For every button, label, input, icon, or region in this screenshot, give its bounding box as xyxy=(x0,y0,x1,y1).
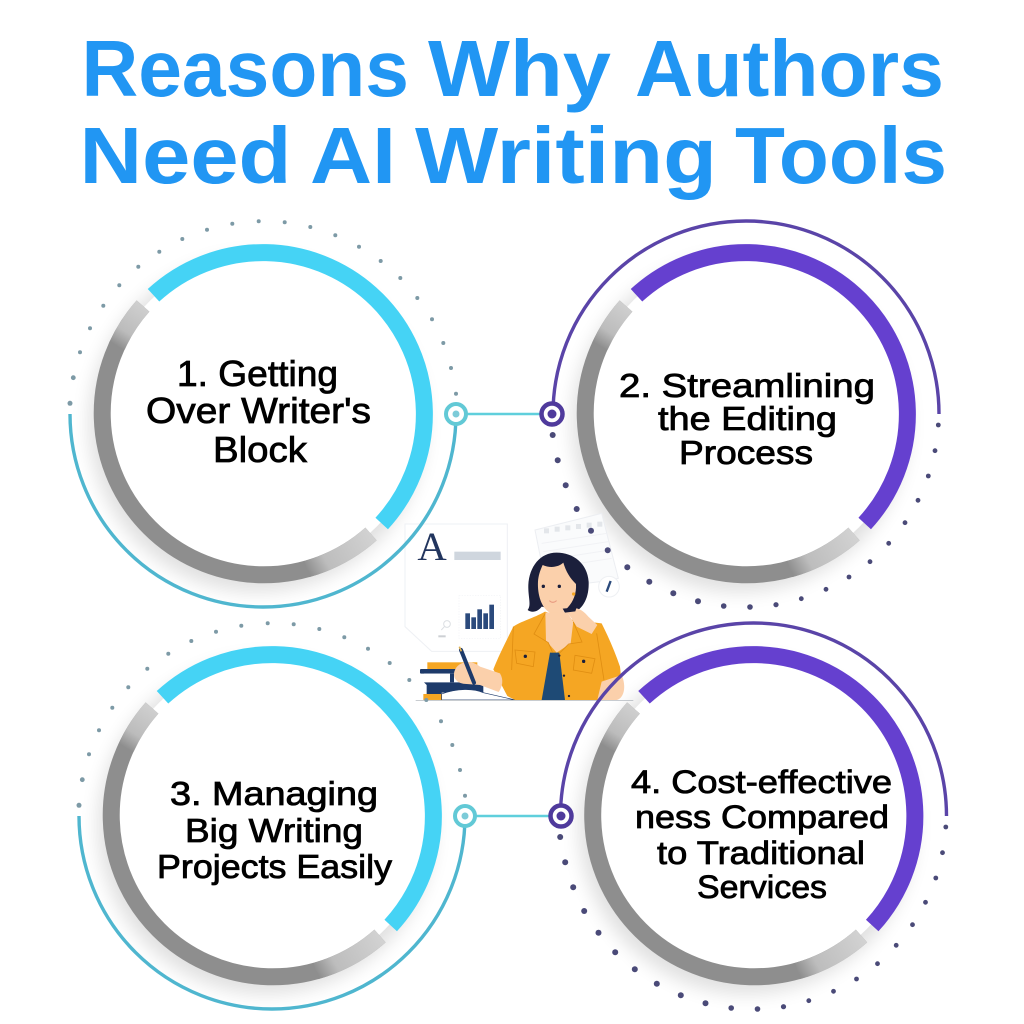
node: cyan xyxy=(446,404,466,424)
ring interiors xyxy=(103,254,914,976)
neck xyxy=(545,612,573,653)
title xyxy=(80,24,947,200)
label 2 xyxy=(619,367,875,471)
panel 2: streamlining the editing process xyxy=(550,221,941,610)
cyan ring segment xyxy=(154,253,424,524)
title line 2: Tools xyxy=(735,111,947,200)
jacket xyxy=(493,612,621,700)
document with letter A and chart: A xyxy=(417,524,447,569)
label 4: ness Compared xyxy=(635,799,889,835)
panel 4: cost-effectiveness xyxy=(557,623,948,1012)
cyan ring segment xyxy=(162,655,433,926)
label 1: Over Writer's xyxy=(146,390,371,431)
label 3: 3. Managing xyxy=(170,775,378,812)
label 1: Block xyxy=(213,429,308,470)
hair xyxy=(528,553,589,613)
thin outer arc xyxy=(560,623,946,816)
grey ring segment xyxy=(593,708,862,977)
dotted arc xyxy=(550,423,941,610)
title line 1: Authors xyxy=(635,24,944,113)
label 2: the Editing xyxy=(658,400,837,437)
books xyxy=(420,662,515,700)
label 4: 4. Cost-effective xyxy=(631,764,892,800)
label 4: Services xyxy=(697,869,827,905)
soft shadows under rings xyxy=(89,256,915,994)
thin outer arc xyxy=(553,221,939,414)
purple ring segment xyxy=(644,655,915,926)
dotted arc xyxy=(557,825,948,1012)
shirt xyxy=(542,653,565,700)
label 3: Projects Easily xyxy=(157,848,393,885)
face and neck xyxy=(538,563,576,614)
raised hand and elbow xyxy=(565,608,597,634)
pen xyxy=(459,647,474,683)
magnifier icon xyxy=(438,621,450,636)
title line 2: Writing xyxy=(415,111,717,200)
grey ring segment xyxy=(585,306,854,575)
label 2: 2. Streamlining xyxy=(619,367,875,404)
label 3 xyxy=(157,775,393,885)
connector: top circles xyxy=(446,404,562,424)
document with letter A and chart xyxy=(405,524,507,651)
thin outer arc xyxy=(70,414,456,607)
panel 3: managing big writing projects xyxy=(76,621,467,1009)
writing arm xyxy=(454,662,502,692)
title line 1: Why xyxy=(428,24,612,113)
label 1 xyxy=(146,353,371,470)
panel 1: getting over writer's block xyxy=(68,219,458,607)
label 3: Big Writing xyxy=(185,812,363,849)
dotted arc xyxy=(68,219,458,406)
label 1: 1. Getting xyxy=(177,353,338,394)
grey ring segment xyxy=(111,708,380,977)
person xyxy=(454,553,624,700)
jacket seams xyxy=(512,613,604,680)
title line 1 xyxy=(82,24,944,113)
node: purple xyxy=(542,404,562,424)
desk line xyxy=(416,699,633,701)
illustration: author at desk xyxy=(405,513,633,700)
bar chart icon xyxy=(465,605,494,629)
node: purple xyxy=(550,806,572,826)
grey ring segment xyxy=(102,306,371,575)
tilted paper xyxy=(535,513,619,597)
title line 2 xyxy=(80,111,947,200)
dotted arc xyxy=(76,621,467,808)
thin outer arc xyxy=(79,816,465,1009)
purple ring segment xyxy=(636,253,907,524)
jacket buttons xyxy=(524,654,585,697)
label 2: Process xyxy=(679,434,813,471)
title line 2: Need xyxy=(80,111,292,200)
label 4: to Traditional xyxy=(657,835,865,871)
title line 1: Reasons xyxy=(82,24,409,113)
connector: bottom circles xyxy=(455,806,572,826)
node: cyan xyxy=(455,806,475,826)
title line 2: AI xyxy=(310,111,396,200)
label 4 xyxy=(631,764,892,905)
